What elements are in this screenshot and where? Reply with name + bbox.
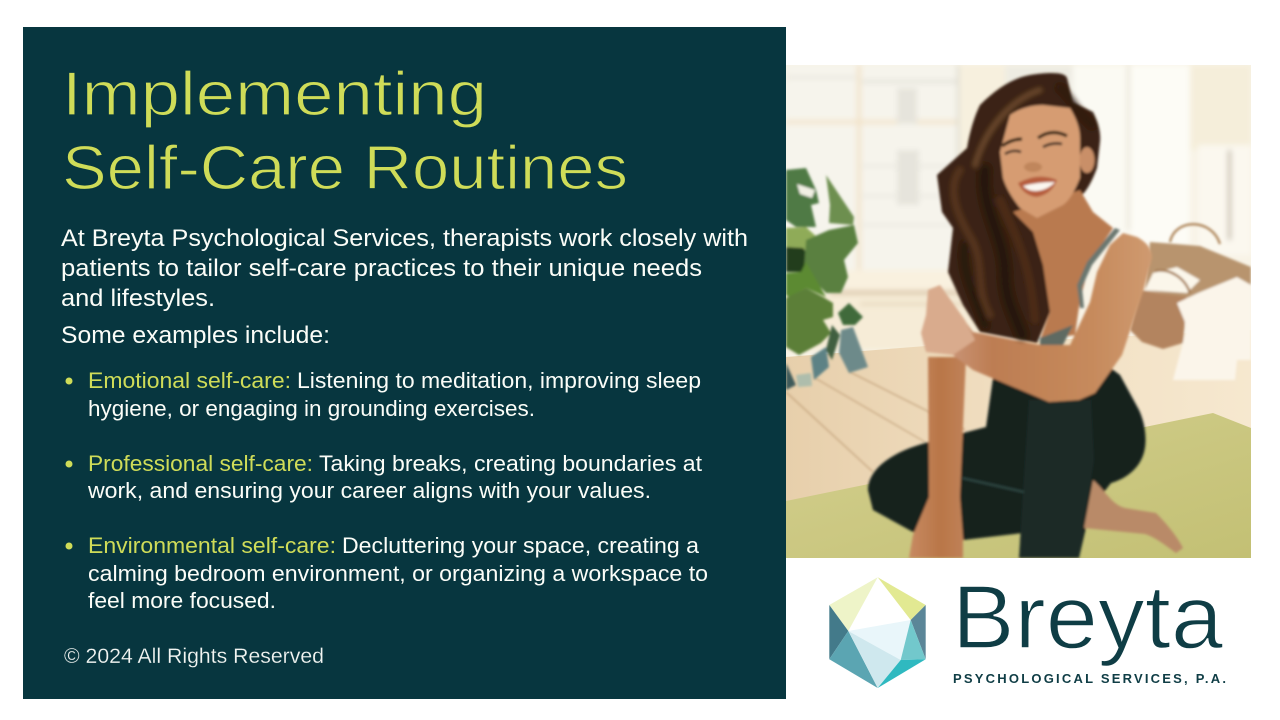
bullet: environmental self-care: Environmental self-care: (88, 533, 336, 558)
basket and blanket (1130, 224, 1251, 380)
foot (1084, 480, 1183, 553)
yoga mat (786, 413, 1251, 558)
bullet: emotional self-care: Emotional self-care: (88, 368, 291, 393)
hand on arm (921, 285, 975, 355)
icon: faceted hexagon (829, 577, 926, 688)
bullet: environmental self-care: feel more focused. (88, 588, 276, 613)
ear (1080, 147, 1094, 173)
bullet: professional self-care (66, 451, 703, 503)
wordmark: Breyta (952, 568, 1224, 668)
bullet: emotional self-care: hygiene, or engaging in grounding exercises. (88, 396, 535, 421)
logo: Breyta (829, 568, 1226, 688)
bullet: emotional self-care (66, 368, 701, 421)
bullet: professional self-care: Professional self-care: (88, 451, 313, 476)
floor (786, 330, 1251, 510)
bullet: environmental self-care: calming bedroom environment, or organizing a workspace to (88, 561, 708, 586)
intro text block: and lifestyles. (61, 285, 215, 312)
bullet: emotional self-care: Listening to meditation, improving sleep (297, 368, 701, 393)
intro text block (61, 225, 748, 349)
intro text block: At Breyta Psychological Services, therapists work closely with (61, 225, 748, 252)
panel: dark teal text panel (23, 27, 786, 699)
title: Implementing (62, 60, 487, 129)
title (62, 60, 628, 203)
brows and eyes (1002, 132, 1067, 146)
arm to floor (909, 357, 966, 558)
crossing arm (953, 233, 1152, 402)
torso and neck skin (1013, 190, 1113, 340)
tagline: PSYCHOLOGICAL SERVICES, P.A. (953, 671, 1226, 686)
face (1000, 105, 1080, 218)
bullet: professional self-care: Taking breaks, creating boundaries at (319, 451, 703, 476)
plant (786, 168, 868, 390)
copyright: © 2024 All Rights Reserved (64, 645, 324, 668)
mouth (1018, 177, 1057, 197)
intro text block: patients to tailor self-care practices to their unique needs (61, 255, 702, 282)
nose (1024, 162, 1042, 172)
top strap and top (1077, 228, 1120, 308)
bullet: environmental self-care: Decluttering your space, creating a (342, 533, 699, 558)
title: Self-Care Routines (62, 134, 628, 203)
bullet: environmental self-care (66, 533, 708, 613)
leggings (868, 360, 1146, 558)
hair texture (954, 88, 1092, 335)
photo: smiling woman seated on a yoga mat (786, 65, 1251, 558)
intro text block: Some examples include: (61, 322, 330, 349)
hair (937, 73, 1100, 343)
bullet: professional self-care: work, and ensuring your career aligns with your values. (87, 478, 651, 503)
